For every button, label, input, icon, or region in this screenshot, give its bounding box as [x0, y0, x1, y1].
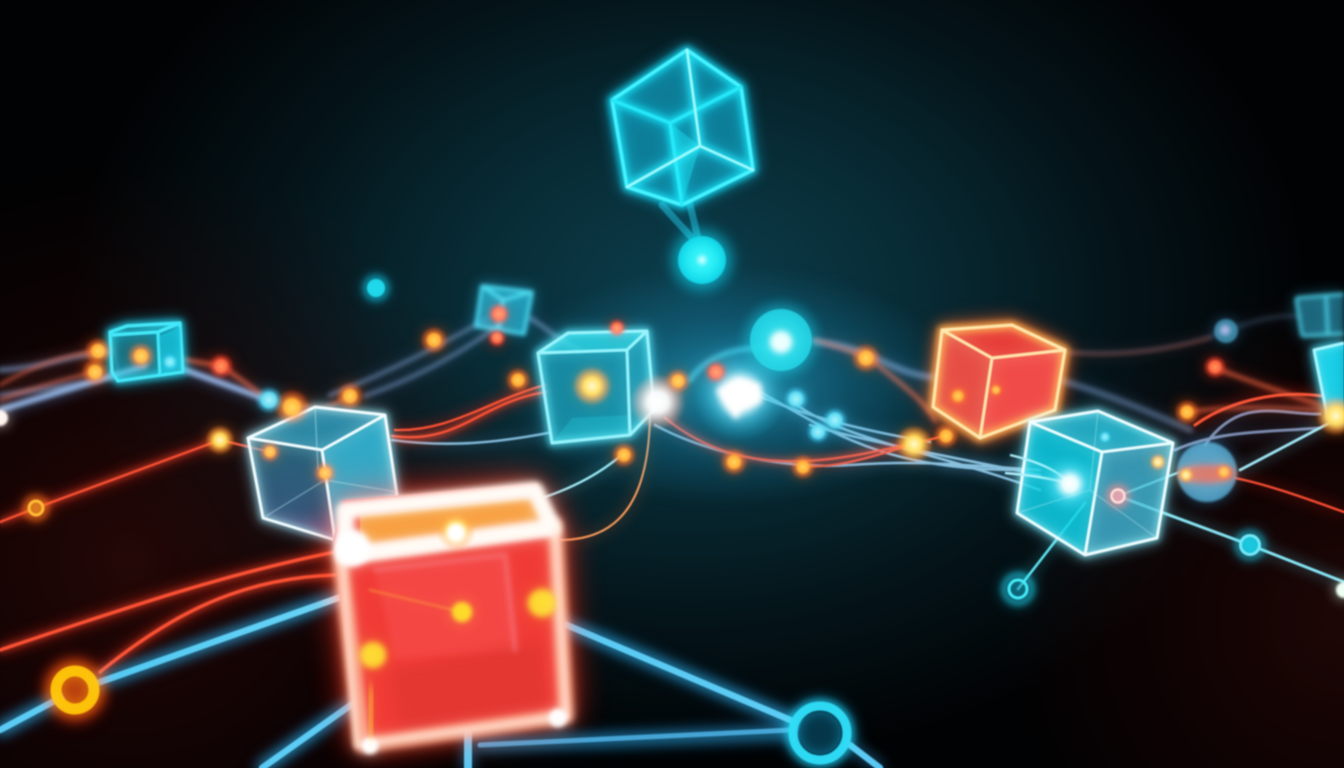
network lines: blue strands	[0, 316, 1320, 497]
glow: right cube core	[1040, 454, 1100, 514]
soft glow: central band	[500, 265, 960, 505]
node: orange ring left	[22, 494, 50, 522]
sphere: right translucent	[1177, 442, 1237, 502]
cube: center-left translucent	[538, 331, 654, 443]
node: large orange ring	[45, 660, 105, 720]
cube: right orange-red	[933, 325, 1065, 438]
node: large cyan ring	[790, 703, 850, 763]
node: teal ring right	[1237, 532, 1263, 558]
nodes: cyan dots	[161, 353, 1112, 444]
sphere: central translucent	[745, 304, 817, 376]
node: edge bright dot left	[0, 410, 8, 426]
network lines: red strands	[0, 338, 1344, 672]
node: cyan sphere under top cube	[671, 229, 733, 291]
burst: central light	[630, 346, 788, 442]
nodes: orange dots	[81, 302, 1344, 485]
cube: right large cyan	[1005, 411, 1173, 555]
cube: small blurred upper	[476, 286, 532, 334]
node: cyan ring bottom	[1004, 575, 1032, 603]
cube: top cyan wireframe	[612, 50, 753, 205]
cube: large red foreground	[333, 483, 570, 754]
node: edge bright dot right	[1336, 582, 1344, 598]
cube: left white outline	[248, 407, 397, 540]
cube: right edge lower	[1314, 343, 1344, 425]
cube: right edge upper	[1296, 294, 1344, 336]
sphere: upper right blurred	[1214, 319, 1238, 343]
node: pink ring in right cube	[1106, 484, 1130, 508]
cube: small left cyan	[110, 323, 183, 381]
node: small cyan dot	[362, 274, 390, 302]
network lines: near cyan beams	[0, 205, 1344, 768]
